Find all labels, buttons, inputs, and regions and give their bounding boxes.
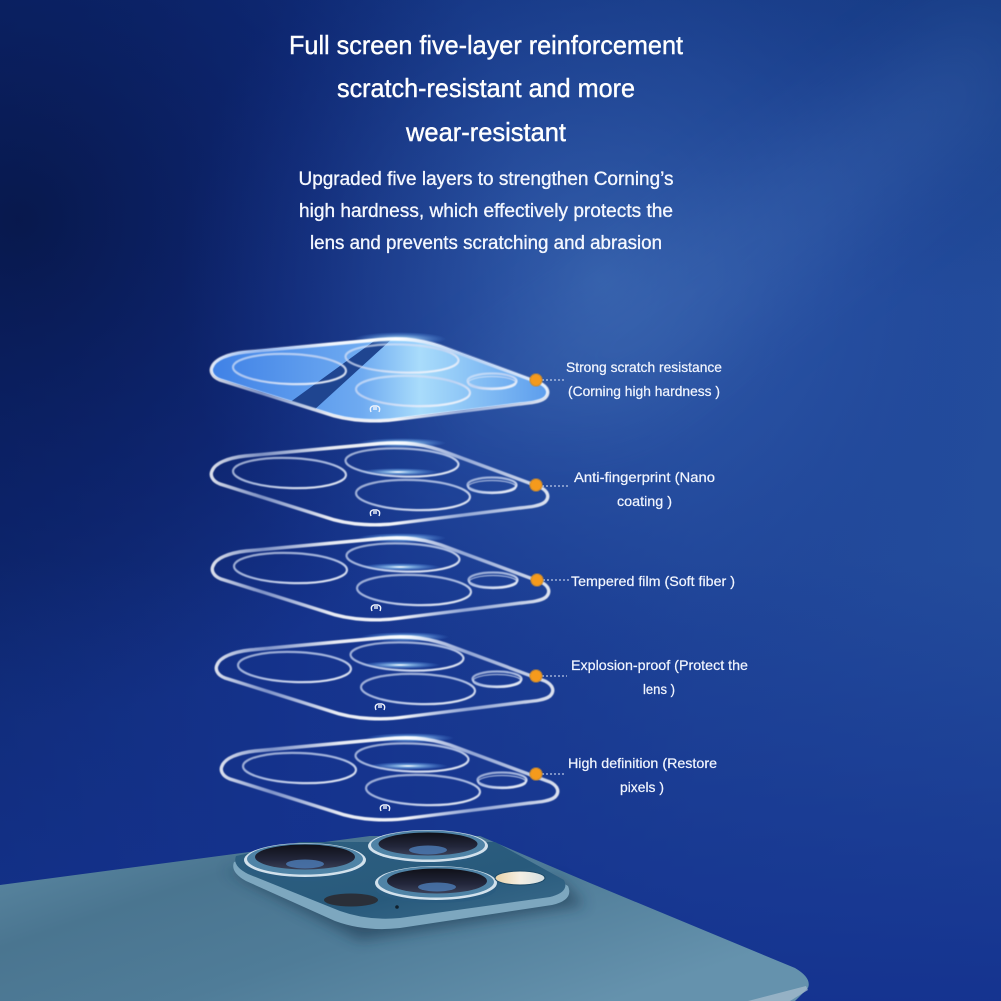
phone bottom edge (748, 986, 808, 1001)
title (289, 30, 684, 147)
layer 4: explosion-proof (216, 632, 553, 719)
camera island shadow (225, 870, 585, 940)
title: Full screen five-layer reinforcement (289, 30, 684, 60)
subtitle text: lens and prevents scratching and abrasion (310, 233, 662, 254)
layer 2: anti-fingerprint (211, 438, 548, 525)
callout: anti-fingerprint: coating ) (617, 493, 672, 509)
callout: strong scratch resistance: (Corning high hardness ) (568, 383, 720, 399)
title: wear-resistant (405, 117, 567, 147)
lens bottom (375, 866, 497, 903)
callout: strong scratch resistance: Strong scratch resistance (566, 359, 722, 375)
phone body (0, 836, 809, 1001)
phone with camera module (0, 830, 809, 1001)
title: scratch-resistant and more (337, 73, 635, 103)
layer 1: scratch resistant glass (211, 332, 548, 421)
callout: explosion-proof: lens ) (643, 681, 675, 697)
subtitle text: high hardness, which effectively protects the (299, 201, 673, 222)
subtitle text (298, 169, 674, 254)
callout: high definition (530, 755, 717, 795)
layer 3: tempered film (212, 533, 549, 620)
callout: anti-fingerprint (530, 469, 715, 509)
callout: strong scratch resistance (530, 359, 722, 399)
callout: tempered film: Tempered film (Soft fiber ) (571, 573, 735, 589)
flash (495, 871, 545, 885)
callout: high definition: pixels ) (620, 779, 664, 795)
layer 5: high definition (221, 733, 558, 820)
callout: high definition: High definition (Restore (568, 755, 717, 771)
camera island rim (233, 845, 569, 929)
microphone (395, 905, 399, 909)
subtitle text: Upgraded five layers to strengthen Corning’s (298, 169, 674, 190)
lidar sensor (324, 894, 378, 906)
lens top-left (244, 843, 366, 881)
lens top-right (368, 830, 488, 864)
camera island (235, 842, 565, 919)
callout: anti-fingerprint: Anti-fingerprint (Nano (574, 469, 715, 485)
callout: explosion-proof (530, 657, 748, 697)
callout: explosion-proof: Explosion-proof (Protect the (571, 657, 748, 673)
